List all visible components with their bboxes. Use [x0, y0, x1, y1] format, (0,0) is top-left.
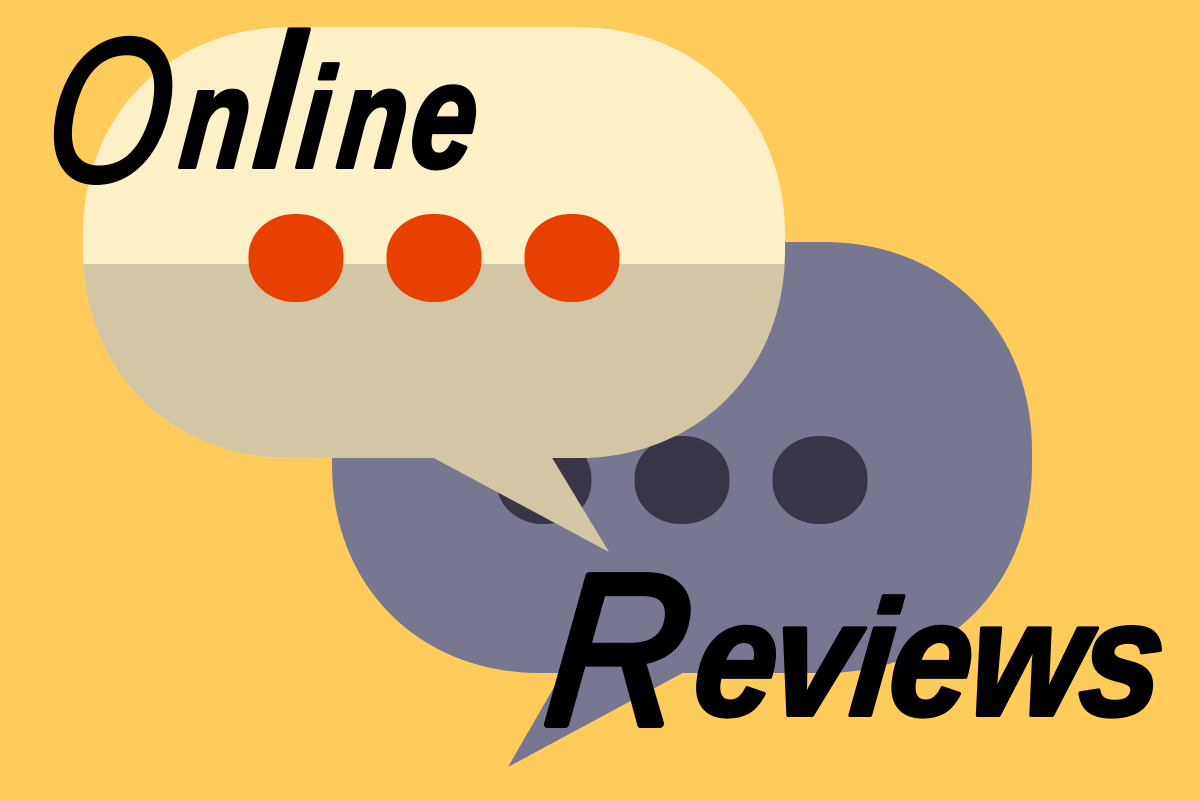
back bubble tail: [508, 668, 692, 767]
front bubble upper body: [83, 27, 785, 458]
icon: back speech bubble: [332, 242, 1032, 767]
title word: Online: O: [37, 0, 185, 225]
front bubble dots: [248, 214, 620, 302]
title word: Online: e: [404, 31, 486, 199]
back bubble dots: [496, 436, 868, 524]
title word: Online: n: [175, 39, 259, 198]
icon: front speech bubble: [83, 27, 785, 552]
title word: Reviews: R: [537, 530, 702, 770]
title word: Reviews: eviews: [686, 567, 1174, 751]
title word: Online: in: [292, 39, 416, 198]
back bubble body: [332, 242, 1032, 673]
front bubble lower shade and tail: [83, 264, 785, 552]
title word: Online: l: [247, 0, 313, 208]
